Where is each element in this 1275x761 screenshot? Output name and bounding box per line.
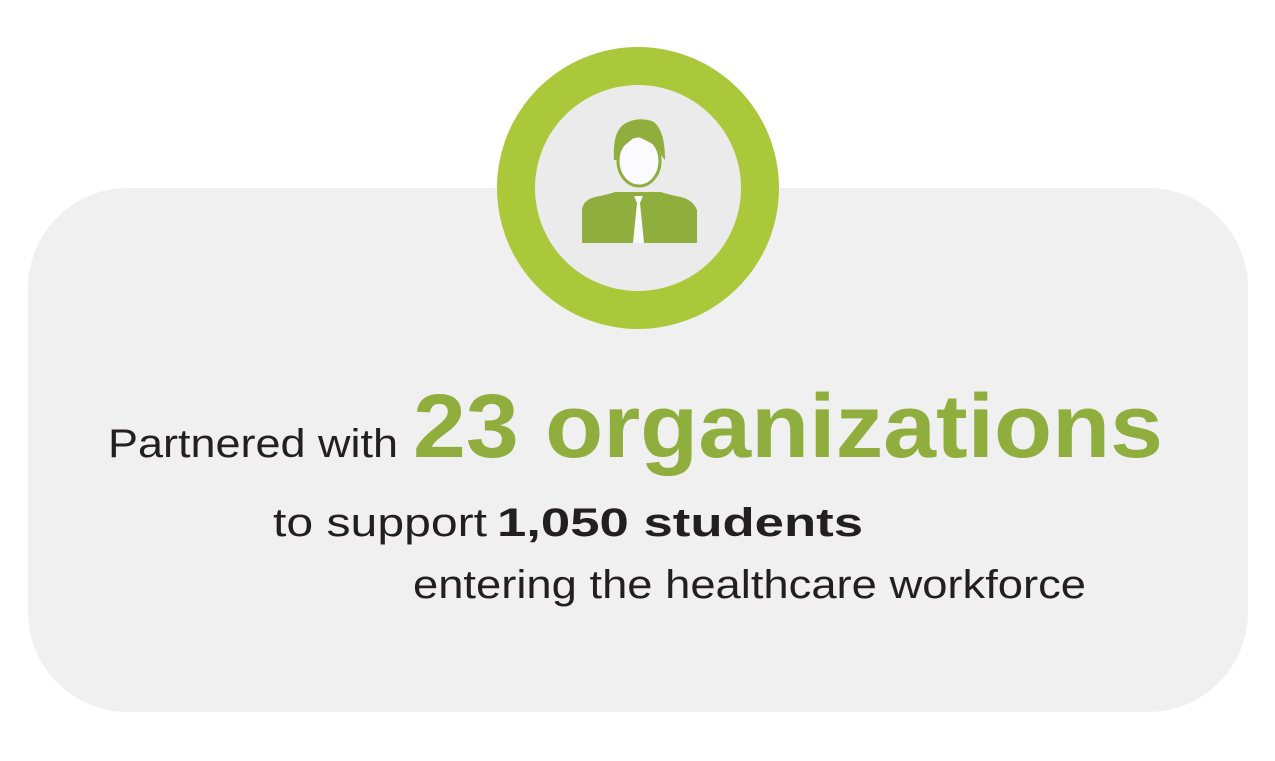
text block: headline line 1: 23 organizations [413,377,1163,477]
text block: line 2: to support [273,501,487,545]
text block: headline line 1: Partnered with [108,422,398,466]
text block: headline line 1 [108,377,1163,477]
panel: background card [28,188,1248,712]
text block: line 2: 1,050 students [497,501,863,545]
text block: line 2 [273,501,863,545]
icon: person in green ring [497,47,779,329]
text block: line 3: entering the healthcare workforce [413,563,1086,607]
